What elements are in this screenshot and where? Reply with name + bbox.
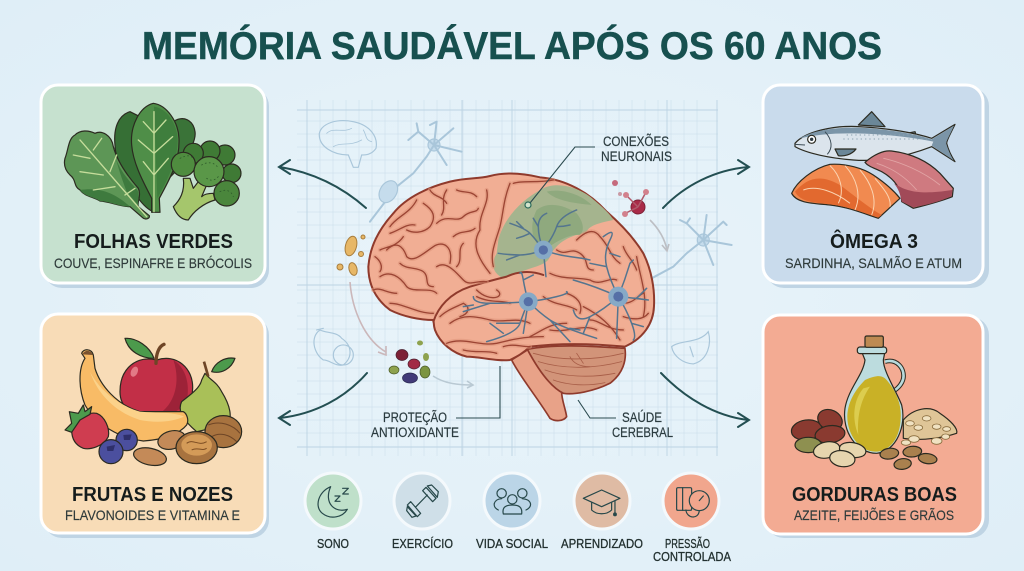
gyri shading and sulci <box>373 180 648 353</box>
brain stem <box>512 348 567 421</box>
callout: proteção antioxidante: ANTIOXIDANTE <box>371 425 459 440</box>
panel: frutas e nozes <box>41 314 269 538</box>
lifestyle item: aprendizado <box>561 473 643 551</box>
lifestyle item: exercício: EXERCÍCIO <box>392 536 453 551</box>
icon: fruits and nuts <box>65 338 242 468</box>
callout: conexões neuronais: CONEXÕES <box>603 134 669 149</box>
faint sketches: brain, neurons, fruit <box>314 121 732 365</box>
lifestyle item: aprendizado: APRENDIZADO <box>561 536 643 551</box>
icon: people <box>494 489 531 514</box>
blueprint grid background <box>297 100 718 456</box>
neuron: lower <box>463 272 597 342</box>
heading: GORDURAS BOAS <box>792 484 957 506</box>
lifestyle item: pressão controlada <box>653 473 731 564</box>
callout: saúde cerebral: CEREBRAL <box>612 425 673 440</box>
lifestyle item: pressão controlada: CONTROLADA <box>653 549 731 564</box>
lifestyle item: vida social <box>476 473 548 551</box>
callout: proteção antioxidante: PROTEÇÃO <box>383 410 447 425</box>
callout: conexões neuronais <box>525 134 672 208</box>
text: SARDINHA, SALMÃO E ATUM <box>785 255 962 271</box>
lifestyle item: sono: SONO <box>317 536 349 551</box>
icon: dumbbell <box>407 485 438 517</box>
lifestyle item: sono <box>305 473 361 551</box>
cerebellum <box>527 346 625 394</box>
neuron: right <box>573 232 648 340</box>
icon: fish and fillets <box>792 112 955 218</box>
title: MEMÓRIA SAUDÁVEL APÓS OS 60 ANOS <box>142 24 882 68</box>
callout: saúde cerebral: SAÚDE <box>622 410 662 425</box>
heading: FRUTAS E NOZES <box>72 484 233 506</box>
arrow: to ômega 3 <box>663 160 749 208</box>
neuron: upper <box>498 210 590 277</box>
text: FLAVONOIDES E VITAMINA E <box>65 507 240 523</box>
callout: saúde cerebral <box>578 400 673 440</box>
heading: FOLHAS VERDES <box>74 231 233 253</box>
molecules: antioxidants <box>337 180 669 388</box>
arrow: to folhas verdes <box>279 160 366 208</box>
icon: graduation cap <box>583 490 620 516</box>
icon: blood pressure gauge <box>677 488 709 517</box>
green highlighted region <box>493 185 613 278</box>
text: COUVE, ESPINAFRE E BRÓCOLIS <box>54 255 252 271</box>
lifestyle item: pressão controlada: PRESSÃO <box>665 536 710 551</box>
temporal lobe fold <box>433 272 543 322</box>
panel: gorduras boas <box>763 315 989 538</box>
lifestyle item: exercício <box>392 473 453 551</box>
arrow: to gorduras boas <box>661 373 749 427</box>
arrow: to frutas e nozes <box>279 373 367 425</box>
text: AZEITE, FEIJÕES E GRÃOS <box>794 507 954 523</box>
callout: proteção antioxidante <box>371 366 500 440</box>
brain illustration <box>368 173 654 421</box>
icon: moon <box>318 487 348 517</box>
icon: leafy greens and broccoli <box>64 103 241 220</box>
heading: ÔMEGA 3 <box>830 229 918 253</box>
panel: folhas verdes <box>41 85 269 288</box>
panel: ômega 3 <box>763 85 989 288</box>
lifestyle item: vida social: VIDA SOCIAL <box>476 536 548 551</box>
callout: conexões neuronais: NEURONAIS <box>601 149 672 164</box>
cerebrum <box>368 173 654 360</box>
icon: olive oil and beans <box>790 336 957 470</box>
